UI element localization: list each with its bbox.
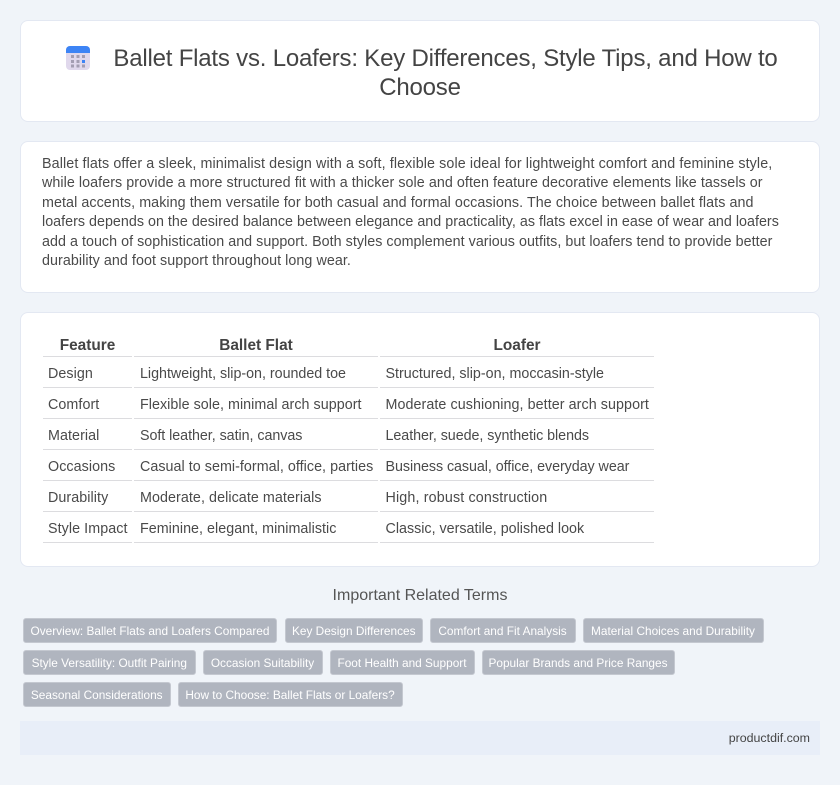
table: ballet flat vs loafer: Lightweight, slip-on, rounded toe <box>140 366 346 382</box>
table: ballet flat vs loafer: Style Impact <box>48 521 128 537</box>
tags: related terms <box>23 618 764 707</box>
table: ballet flat vs loafer: Loafer <box>493 337 541 354</box>
icon: calendar <box>66 46 90 70</box>
table: ballet flat vs loafer: Casual to semi-formal, office, parties <box>140 459 373 475</box>
tags: related terms: Style Versatility: Outfit Pairing <box>32 656 187 670</box>
text block: introduction <box>42 156 779 269</box>
table: ballet flat vs loafer: Durability <box>48 490 108 506</box>
tags: related terms: Key Design Differences <box>292 624 416 638</box>
table: ballet flat vs loafer: Design <box>48 366 93 382</box>
table: ballet flat vs loafer: Occasions <box>48 459 115 475</box>
tags: related terms: Seasonal Considerations <box>31 688 163 702</box>
text block: introduction: Ballet flats offer a sleek, minimalist design with a soft, flexible sole ideal for lightweight comfort and feminine style, <box>42 156 772 172</box>
tags: related terms: Overview: Ballet Flats and Loafers Compared <box>31 624 269 638</box>
tags: related terms: Occasion Suitability <box>211 656 314 670</box>
footer bar <box>20 721 820 755</box>
title: Choose <box>379 74 461 101</box>
panel: header <box>20 20 820 122</box>
table: ballet flat vs loafer: High, robust construction <box>386 490 547 506</box>
table: ballet flat vs loafer: Comfort <box>48 397 99 413</box>
table: ballet flat vs loafer: Business casual, office, everyday wear <box>386 459 629 475</box>
text block: introduction: metal accents, making them versatile for both casual and formal occasions. The choice between ballet flats and <box>42 195 754 211</box>
title: Ballet Flats vs. Loafers: Key Differences, Style Tips, and How to <box>113 45 778 72</box>
tags: related terms: Foot Health and Support <box>337 656 467 670</box>
title <box>113 45 778 101</box>
table: ballet flat vs loafer: Flexible sole, minimal arch support <box>140 397 362 413</box>
text block: introduction: durability and foot support throughout long wear. <box>42 253 351 269</box>
table: ballet flat vs loafer: Feature <box>60 337 115 354</box>
table: ballet flat vs loafer: Ballet Flat <box>219 337 293 354</box>
tags: related terms: How to Choose: Ballet Flats or Loafers? <box>185 688 395 702</box>
table: ballet flat vs loafer: Classic, versatile, polished look <box>386 521 584 537</box>
table: ballet flat vs loafer: Soft leather, satin, canvas <box>140 428 302 444</box>
footer source label: productdif.com <box>729 731 810 745</box>
table: ballet flat vs loafer: Leather, suede, synthetic blends <box>386 428 589 444</box>
table: ballet flat vs loafer: Moderate, delicate materials <box>140 490 322 506</box>
panel: comparison table <box>20 312 820 567</box>
table: ballet flat vs loafer: Moderate cushioning, better arch support <box>386 397 649 413</box>
text block: introduction: add a touch of sophistication and support. Both styles complement various outfits, but loafers tend to provide better <box>42 234 772 250</box>
tags: related terms: Comfort and Fit Analysis <box>438 624 567 638</box>
text block: introduction: loafers depends on the desired balance between elegance and practicality, as flats excel in ease of wear and loafers <box>42 214 779 230</box>
table: ballet flat vs loafer: Material <box>48 428 99 444</box>
table: ballet flat vs loafer: Structured, slip-on, moccasin-style <box>386 366 604 382</box>
panel: introduction <box>20 141 820 293</box>
tags: related terms: Popular Brands and Price Ranges <box>488 656 668 670</box>
heading: important related terms: Important Related Terms <box>333 587 507 604</box>
text block: introduction: while loafers provide a more structured fit with a thicker sole and often feature decorative elements like tassels or <box>42 175 763 191</box>
table: ballet flat vs loafer: Feminine, elegant, minimalistic <box>140 521 336 537</box>
table: ballet flat vs loafer <box>43 337 654 543</box>
tags: related terms: Material Choices and Durability <box>591 624 755 638</box>
